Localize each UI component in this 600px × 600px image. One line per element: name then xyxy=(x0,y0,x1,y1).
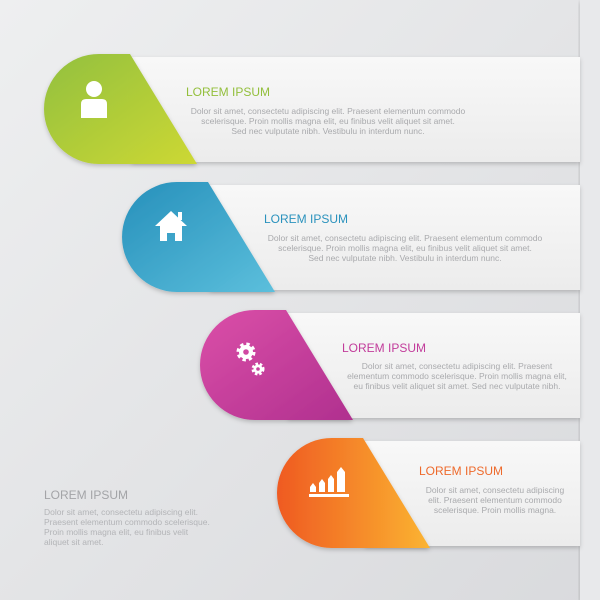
text block: scelerisque. Proin mollis magna elit, eu finibus velit aliquet sit amet. xyxy=(278,243,532,253)
bottom-left text block: LOREM IPSUM xyxy=(44,488,128,502)
text block: eu finibus velit aliquet sit amet. Sed nec vulputate nibh. xyxy=(354,381,560,391)
heading: LOREM IPSUM xyxy=(186,85,270,99)
icon: gears xyxy=(238,344,263,374)
text block: scelerisque. Proin mollis magna. xyxy=(434,505,556,515)
bottom-left text block xyxy=(44,488,210,547)
panel: row 1 xyxy=(44,54,580,164)
icon: chart xyxy=(309,467,349,497)
panel: row 2 xyxy=(122,182,580,292)
icon: house xyxy=(155,211,187,241)
bottom-left text block: Proin mollis magna elit, eu finibus velit xyxy=(44,527,189,537)
text block: Sed nec vulputate nibh. Vestibulu in interdum nunc. xyxy=(308,253,502,263)
text block: Dolor sit amet, consectetu adipiscing elit. Praesent elementum commodo xyxy=(268,233,543,243)
heading: LOREM IPSUM xyxy=(342,341,426,355)
text block: elit. Praesent elementum commodo xyxy=(428,495,562,505)
text block: scelerisque. Proin mollis magna elit, eu finibus velit aliquet sit amet. xyxy=(201,116,455,126)
icon: person xyxy=(81,81,107,118)
panel: row 4 xyxy=(277,438,580,548)
text block: Dolor sit amet, consectetu adipiscing elit. Praesent elementum commodo xyxy=(191,106,466,116)
panel: row 3 xyxy=(200,310,580,420)
text block: elementum commodo scelerisque. Proin mollis magna elit, xyxy=(347,371,567,381)
bottom-left text block: Dolor sit amet, consectetu adipiscing elit. xyxy=(44,507,198,517)
text block: Dolor sit amet, consectetu adipiscing elit. Praesent xyxy=(362,361,553,371)
text block: Sed nec vulputate nibh. Vestibulu in interdum nunc. xyxy=(231,126,425,136)
text block: Dolor sit amet, consectetu adipiscing xyxy=(426,485,564,495)
right strip xyxy=(580,0,600,600)
bottom-left text block: aliquet sit amet. xyxy=(44,537,104,547)
heading: LOREM IPSUM xyxy=(419,464,503,478)
bottom-left text block: Praesent elementum commodo scelerisque. xyxy=(44,517,210,527)
heading: LOREM IPSUM xyxy=(264,212,348,226)
